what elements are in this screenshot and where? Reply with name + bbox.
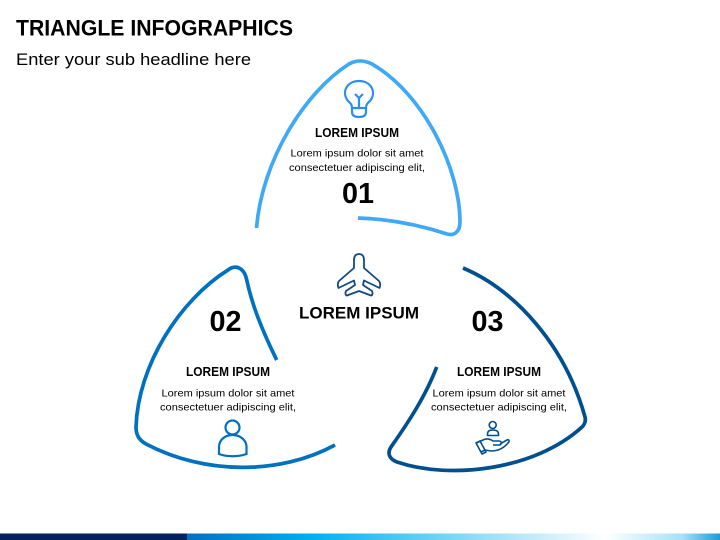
heading 01: LOREM IPSUM — [315, 126, 399, 140]
center heading: LOREM IPSUM — [299, 304, 419, 322]
panel: 01 — [256, 61, 460, 234]
body text 01: consectetuer adipiscing elit, — [289, 162, 425, 174]
body text 03: Lorem ipsum dolor sit amet — [432, 388, 566, 400]
footer gradient segment — [187, 534, 720, 540]
icon: person — [219, 420, 246, 456]
panel: 03 — [389, 268, 585, 471]
subtitle: Enter your sub headline here — [16, 50, 251, 69]
body text 02: Lorem ipsum dolor sit amet — [162, 388, 295, 400]
footer navy segment — [0, 534, 187, 540]
panel: 02 — [136, 267, 335, 467]
body text 01 — [289, 148, 425, 174]
icon: hand holding person — [476, 422, 509, 454]
body text 02: consectetuer adipiscing elit, — [160, 402, 296, 414]
body text 03 — [431, 388, 567, 414]
body text 01: Lorem ipsum dolor sit amet — [290, 148, 424, 160]
icon: airplane — [338, 254, 380, 296]
number 01: 01 — [342, 178, 374, 210]
body text 03: consectetuer adipiscing elit, — [431, 402, 567, 414]
arc outline 01 — [256, 61, 460, 234]
number 02: 02 — [210, 306, 242, 338]
heading 02: LOREM IPSUM — [186, 365, 270, 379]
arc outline 02 — [136, 267, 335, 467]
panel: center — [299, 254, 419, 322]
footer bar — [0, 534, 720, 540]
body text 02 — [160, 388, 296, 414]
arc outline 03 — [389, 268, 585, 471]
icon: light bulb — [345, 81, 373, 117]
title: TRIANGLE INFOGRAPHICS — [16, 16, 293, 40]
heading 03: LOREM IPSUM — [457, 365, 541, 379]
number 03: 03 — [472, 306, 504, 338]
